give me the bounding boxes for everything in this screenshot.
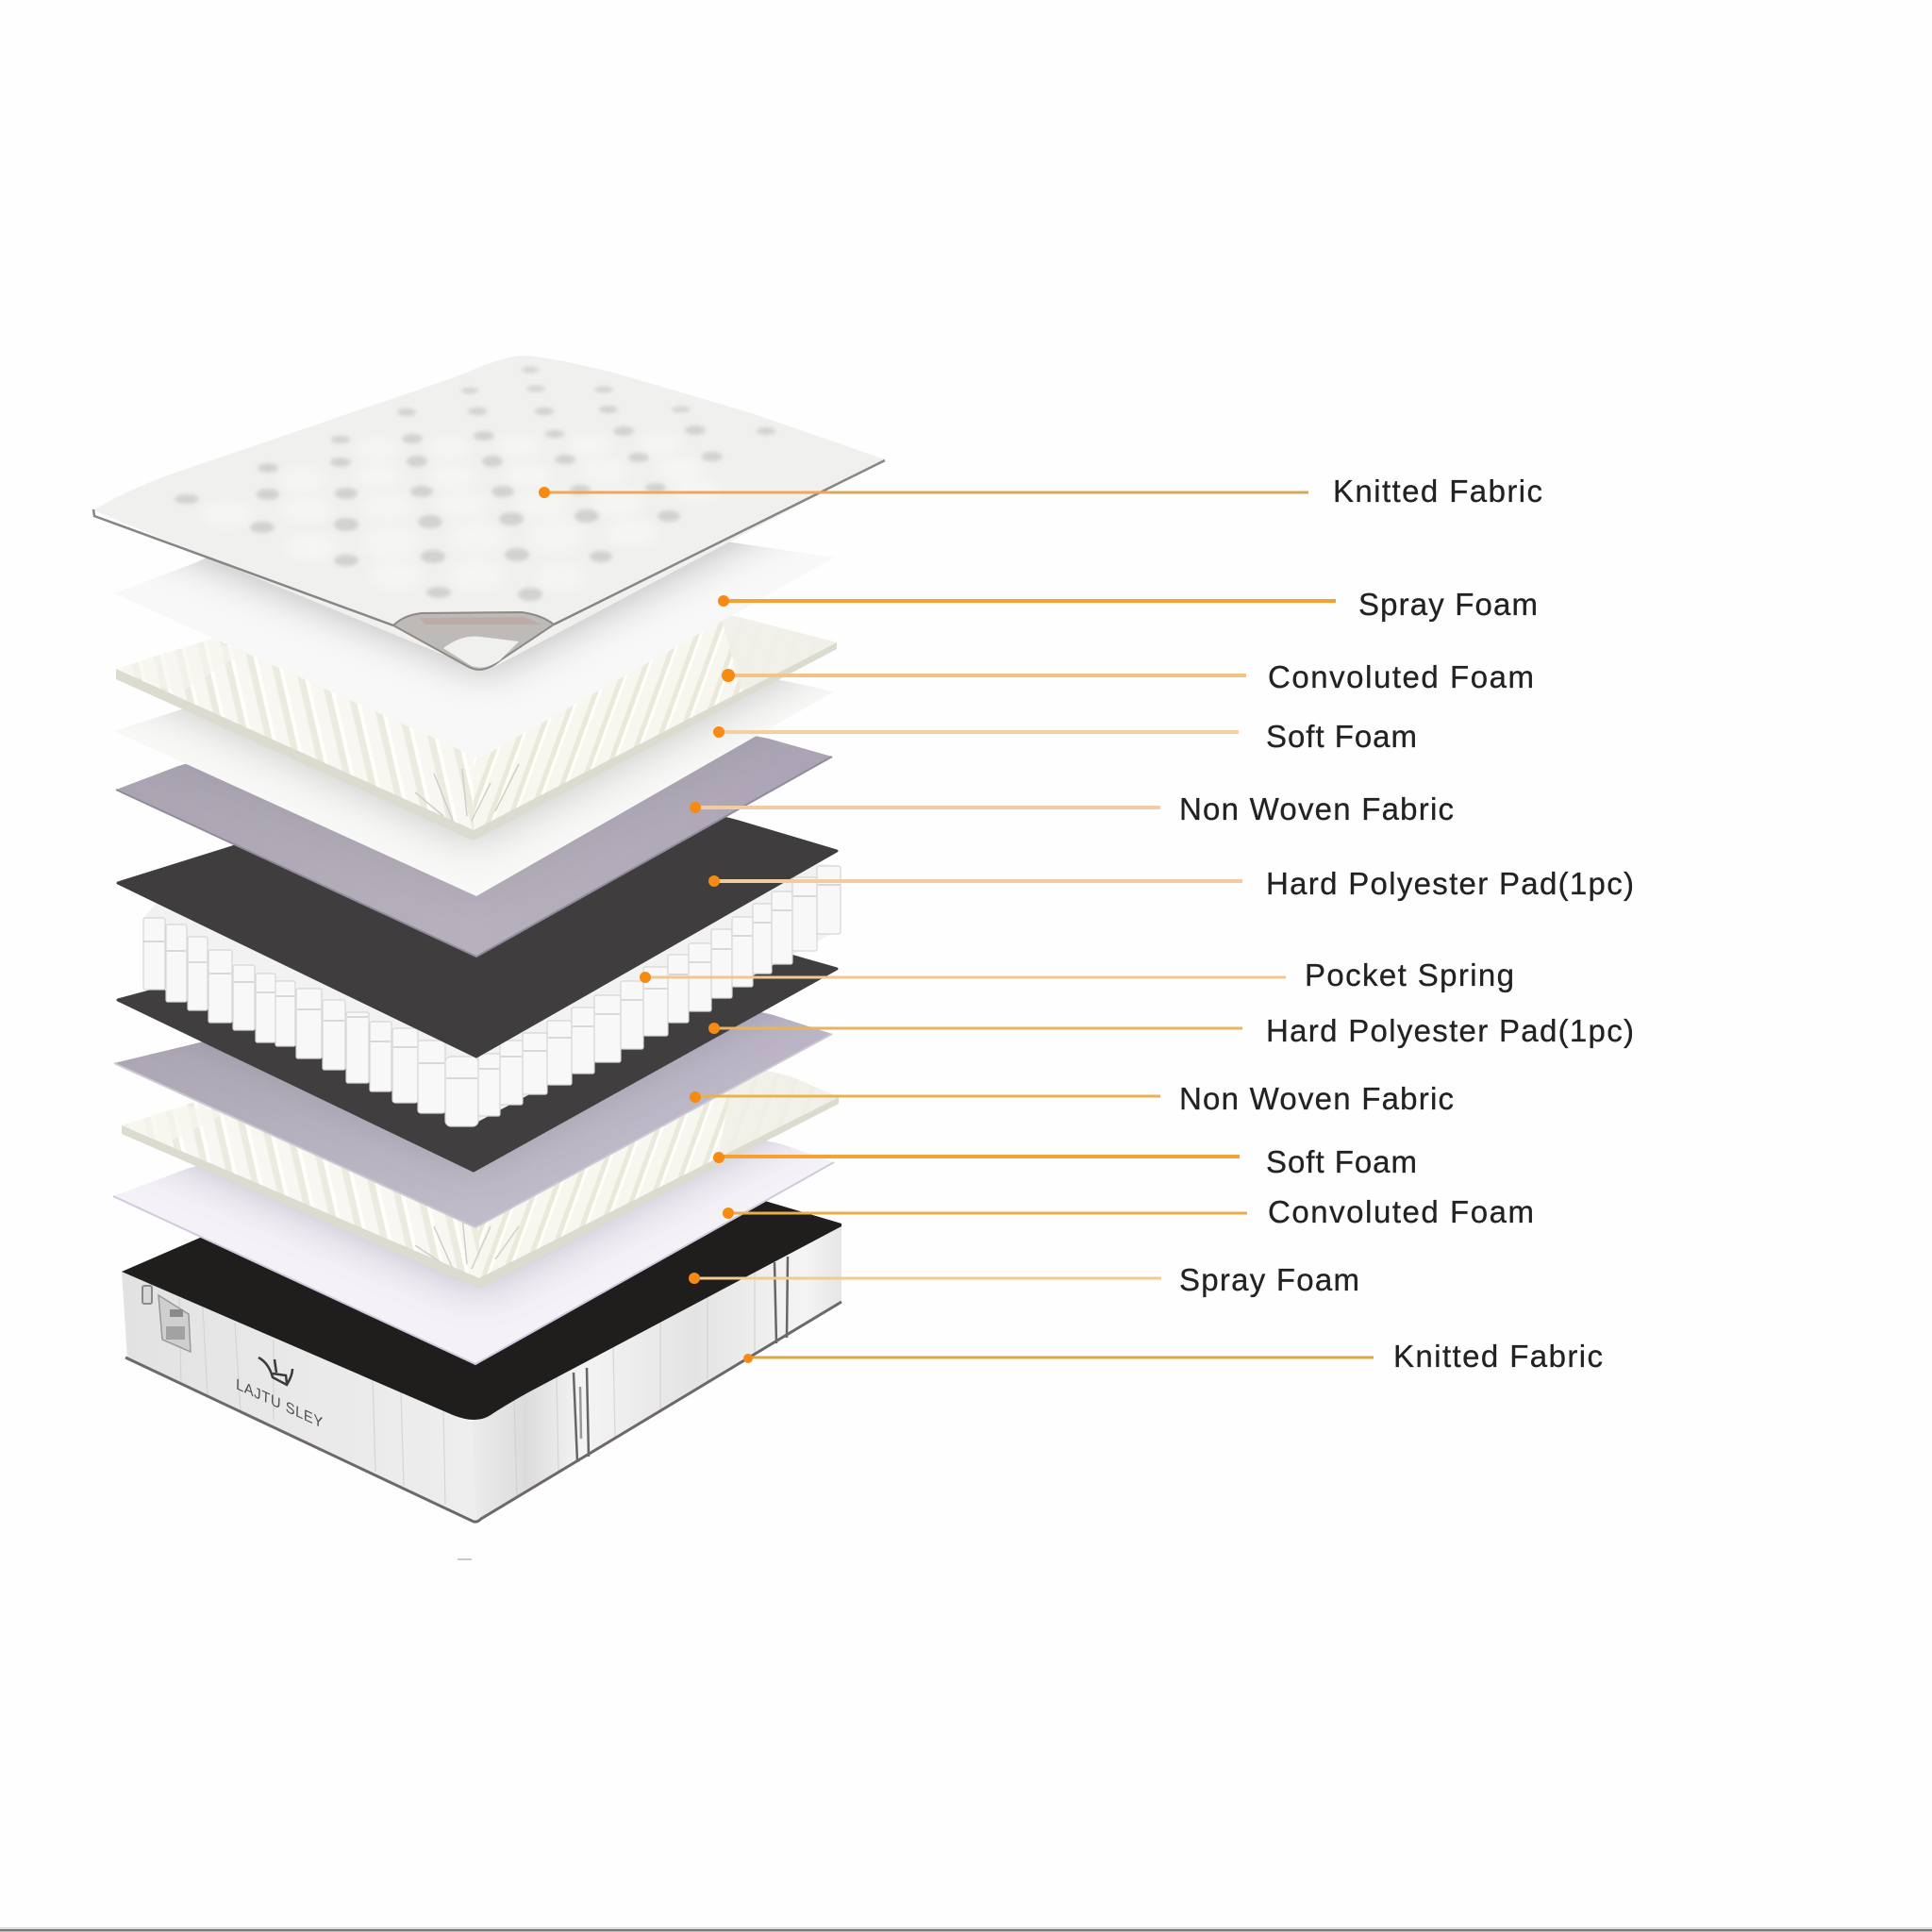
callout: convoluted foam bottom	[723, 1208, 1247, 1219]
callout: knitted fabric top	[539, 487, 1308, 498]
label: spray foam bottom: Spray Foam	[1179, 1262, 1359, 1297]
callout: non woven top	[690, 802, 1160, 813]
layer: pocket spring	[143, 863, 841, 1126]
label: non woven bottom: Non Woven Fabric	[1179, 1081, 1454, 1116]
foam side edge	[116, 642, 837, 841]
callout lines and dots	[539, 487, 1374, 1363]
ribbed surface	[117, 615, 836, 830]
layer: upper convoluted foam	[116, 615, 837, 841]
small stray mark	[458, 1558, 472, 1560]
zipper straps	[574, 1257, 788, 1462]
callout: knitted fabric bottom	[743, 1354, 1374, 1363]
brand crown logo	[258, 1357, 292, 1385]
callout: convoluted foam top	[722, 669, 1246, 682]
label: hard pad top: Hard Polyester Pad(1pc)	[1266, 866, 1634, 901]
label: hard pad bottom: Hard Polyester Pad(1pc)	[1266, 1013, 1634, 1048]
foam side edge	[122, 1097, 839, 1289]
layer: upper spray foam	[158, 541, 790, 758]
quilted tufts	[175, 367, 775, 601]
ribbed surface	[123, 1071, 837, 1278]
callout: soft foam bottom	[713, 1152, 1240, 1163]
torn corner showing fill	[393, 612, 554, 670]
label: soft foam top: Soft Foam	[1266, 719, 1417, 754]
fabric body	[93, 356, 885, 671]
callout: hard pad bottom	[708, 1023, 1242, 1034]
callout: hard pad top	[708, 875, 1242, 887]
callout: spray foam bottom	[689, 1273, 1161, 1284]
layer: top knitted fabric	[93, 356, 885, 671]
fabric edge	[93, 460, 885, 625]
layer: lower spray foam	[113, 1140, 834, 1366]
layer: upper non woven fabric	[115, 736, 832, 958]
layer: lower convoluted foam	[122, 1071, 839, 1289]
layer: lower non woven fabric	[113, 1012, 832, 1228]
layer: upper soft foam	[132, 679, 832, 896]
label: knitted fabric bottom: Knitted Fabric	[1393, 1339, 1603, 1374]
base top black surface	[122, 1113, 841, 1420]
spring backing between columns and upper pad	[143, 863, 841, 1123]
label: soft foam bottom: Soft Foam	[1266, 1144, 1417, 1179]
fabric puffs	[200, 433, 723, 591]
base right face	[471, 1224, 841, 1521]
callout: soft foam top	[713, 726, 1239, 738]
label: convoluted foam top: Convoluted Foam	[1268, 659, 1534, 694]
pocket seams	[143, 885, 840, 1078]
label: pocket spring: Pocket Spring	[1305, 958, 1514, 992]
callout: non woven bottom	[690, 1091, 1160, 1103]
layer: lower hard polyester pad	[118, 896, 837, 1171]
care tags	[142, 1286, 191, 1352]
layer: upper hard polyester pad	[118, 755, 837, 1057]
label: knitted fabric top: Knitted Fabric	[1333, 474, 1542, 508]
spring columns	[143, 866, 841, 1126]
callout: spray foam top	[718, 595, 1336, 607]
layer: base knitted fabric box	[122, 1113, 841, 1522]
callout: pocket spring	[640, 972, 1286, 983]
label: spray foam top: Spray Foam	[1358, 587, 1538, 622]
base pleats	[179, 1270, 755, 1505]
base bottom edge	[125, 1302, 841, 1522]
bottom border line	[0, 1927, 1932, 1932]
label: non woven top: Non Woven Fabric	[1179, 791, 1454, 826]
base left face	[122, 1272, 476, 1521]
layer labels	[1179, 474, 1634, 1374]
label: convoluted foam bottom: Convoluted Foam	[1268, 1194, 1534, 1229]
brand name: LAJTU SLEY	[236, 1375, 324, 1432]
